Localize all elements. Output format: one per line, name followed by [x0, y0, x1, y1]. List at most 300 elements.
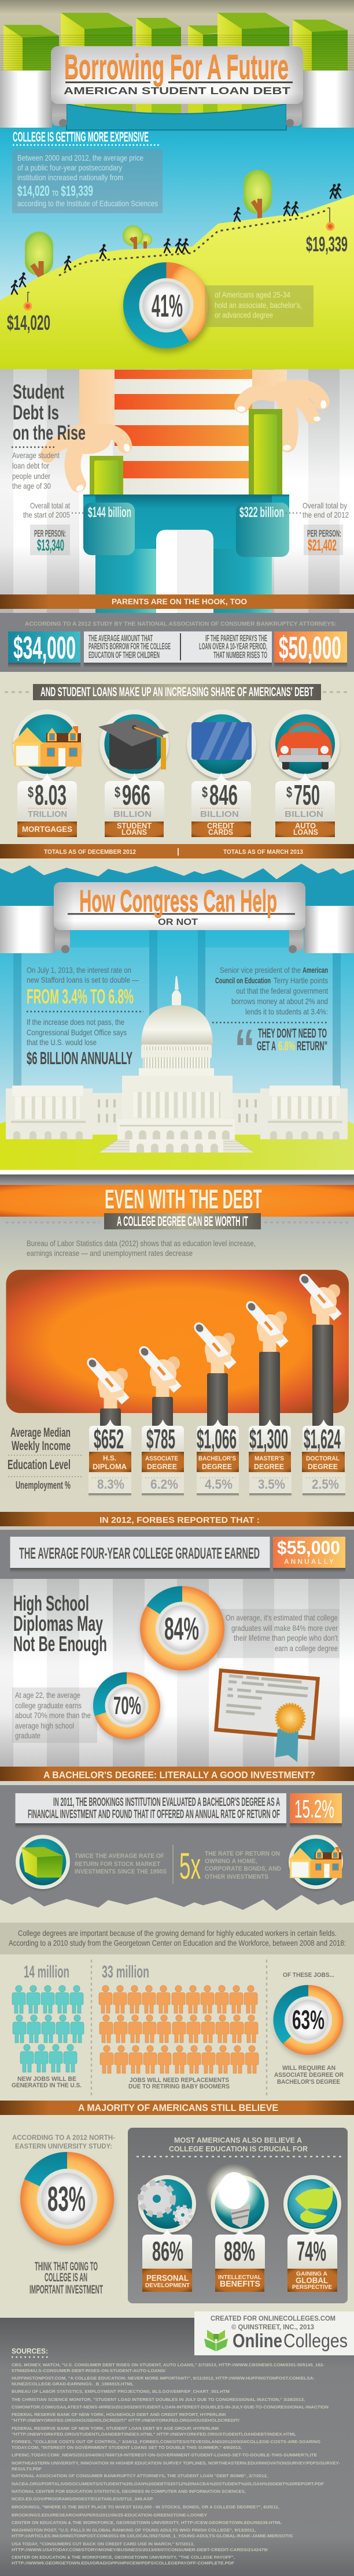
text block: sources list: 57568254/U.S-CONSUMER-DEBT-RISES-ON-STUDENT-AUTO-LOANS/ — [12, 2369, 165, 2373]
text block: sources list: HTTP://WWW9.GEORGETOWN.EDU/GRAD/GPPI/HPI/CEW/PDFS/COLLEGEPAYOFF-COMPLETE.PDF — [12, 2562, 235, 2566]
tag: auto loans value: LOANS — [293, 827, 318, 837]
background: lower sky — [0, 930, 354, 1127]
text block: sources list: FORBES, "COLLEGE COSTS OUT OF CONTROL," 3/24/12, FORBES.COM/SITES/STEVEODLAND/2012/03/24/COLLEGE-COSTS-ARE-SOARING — [12, 2440, 321, 2444]
icon: stacks of money — [0, 13, 354, 116]
tag: personal development: DEVELOPMENT — [145, 2283, 190, 2289]
icon: credit card — [187, 709, 256, 780]
pictogram: 14 million new jobs: 14 million — [24, 1962, 69, 1982]
pictogram: 14 million new jobs — [12, 1962, 84, 2089]
text block: sources list: BUREAU OF LABOR STATISTICS, EMPLOYMENT PROJECTIONS, BLS.GOV/EMP/EP_CHART_001.HTM — [12, 2390, 230, 2394]
row labels: Average Median — [10, 1425, 71, 1440]
ribbon: side bands of congress banner — [0, 906, 354, 953]
panel: graduate earnings — [0, 1526, 354, 1579]
marker: $14,020 — [7, 292, 50, 334]
pictogram: 14 million new jobs: NEW JOBS WILL BE — [17, 2076, 76, 2083]
stat: $55,000 annually — [273, 1537, 345, 1568]
text block: 70 percent: graduate — [15, 1731, 40, 1740]
text block: 70 percent: college graduate earns — [15, 1701, 82, 1710]
donut: 83 percent: EASTERN UNIVERSITY STUDY: — [15, 2143, 112, 2150]
text block: average student loan debt: the age of 30 — [12, 481, 51, 490]
title rule — [65, 81, 293, 83]
icon: capitol building — [6, 976, 348, 1153]
sky curve under banner — [67, 104, 286, 130]
text panel: amounts — [84, 631, 272, 663]
donut: 83 percent — [12, 2135, 115, 2296]
text panel: amounts: THAT NUMBER RISES TO — [213, 650, 267, 660]
tag: intellectual benefits: INTELLECTUAL — [218, 2274, 262, 2281]
text block: sources list: NACBA.ORG/PORTALS/0/DOCUMENTS/STUDENT%20LOAN%20DEBT/020712%20NACBA%20STUDENT%20LOAN%20DEBT%20REPORT.PDF — [12, 2482, 325, 2486]
ground — [0, 1120, 354, 1170]
text block: sources list: NCES.ED.GOV/PROGRAMS/DIGEST/D12/TABLES/DT12_349.ASP — [12, 2497, 153, 2501]
text block: interest rate doubling: new Stafford loans is set to double — — [27, 975, 139, 984]
heading: high school diplomas: Not Be Enough — [13, 1632, 107, 1656]
tag: personal development: PERSONAL — [146, 2273, 189, 2283]
column: master's degree: MASTER'S — [255, 1455, 284, 1462]
text block: sources list: CENTER ON EDUCATION & THE WORKFORCE, GEORGETOWN UNIVERSITY, "THE COLLEGE PAYOFF", — [12, 2556, 235, 2560]
text block: terry hartle quote: Council on Education — [215, 976, 271, 985]
teal podium — [83, 495, 289, 613]
text block: sources list: RESULTS.PDF — [12, 2467, 42, 2471]
column: doctoral degree — [302, 1419, 345, 1496]
label: $144 billion: $144 billion — [88, 504, 131, 521]
tag: auto loans value: BILLION — [285, 809, 323, 819]
column: h.s. diploma: DIPLOMA — [93, 1462, 127, 1471]
icon: light bulb — [206, 2164, 268, 2234]
text block: interest rate doubling: that the U.S. would lose — [27, 1038, 97, 1047]
text block: terry hartle quote: Terry Hartle points — [274, 976, 328, 985]
text block: 70 percent: average high school — [15, 1721, 74, 1730]
chart: income by education level — [6, 1270, 349, 1428]
text: rate of return on owning a home: OWNING A HOME, — [205, 1858, 257, 1865]
text block: 84 percent: earn a college degree — [275, 1644, 338, 1653]
text block: sources list: TODAY.COM, "INTEREST ON GOVERNMENT STUDENT LOANS SET TO DOUBLE THIS SUMMER," 4/9/2013, — [12, 2446, 242, 2450]
stat: auto loans — [271, 709, 340, 837]
capitol right wing — [260, 1086, 348, 1139]
text block: sources list: HUFFINGTONPOST.COM, "A COLLEGE EDUCATION: NEVER MORE IMPORTANT!", 9/11/2012, HTTP://WWW.HUFFINGTONPOST.COM/ELSA- — [12, 2377, 315, 2381]
subheading: or not: OR NOT — [158, 917, 198, 927]
callout: start of 2005 — [23, 501, 84, 555]
capitol left wing — [6, 1086, 93, 1139]
subheading: a college degree can be worth it — [6, 1213, 350, 1229]
background: sources panel — [0, 2318, 354, 2576]
text: twice the average: RETURN FOR STOCK MARKET — [75, 1861, 160, 1868]
band: a majority of americans still believe: A MAJORITY OF AMERICANS STILL BELIEVE — [78, 2102, 278, 2113]
text block: interest rate doubling: On July 1, 2013, the interest rate on — [27, 965, 131, 975]
stat: $34,000: $34,000 — [13, 630, 76, 666]
band: bachelor's investment — [0, 1767, 354, 1781]
column: master's degree: 3.5% — [258, 1477, 285, 1492]
column: associate degree: DEGREE — [147, 1462, 177, 1471]
credit box: online colleges: © QUINSTREET, INC., 2013 — [231, 2323, 314, 2331]
column: master's degree — [249, 1419, 292, 1496]
heading: student debt is on the rise — [12, 381, 86, 447]
text block: interest rate doubling: FROM 3.4% TO 6.8% — [27, 986, 134, 1008]
icon: diploma medal ribbon — [275, 1729, 298, 1762]
tag: mortgages value: $ — [28, 783, 34, 801]
icon: framed diploma — [214, 1668, 320, 1762]
tag: global perspective — [287, 2229, 337, 2292]
tag: personal development: 86% — [152, 2236, 183, 2266]
text block: interest rate doubling — [27, 965, 143, 1068]
tag: student loans value: LOANS — [121, 827, 147, 837]
text block: bureau of labor statistics: earnings increase — and unemployment rates decrease — [27, 1248, 193, 1258]
column: bachelor's degree — [197, 1419, 239, 1496]
text: twice the average: INVESTMENTS SINCE THE 1950S — [75, 1868, 167, 1875]
background: striped debt section — [0, 369, 354, 613]
donut: 63 percent: 63% — [292, 2005, 325, 2035]
text: rate of return on owning a home: THE RATE OF RETURN ON — [205, 1850, 280, 1857]
column: doctoral degree: 2.5% — [312, 1477, 339, 1492]
tag: global perspective: PERSPECTIVE — [292, 2284, 332, 2291]
text block: bureau of labor statistics: Bureau of Labor Statistics data (2012) shows that as education level increase, — [27, 1239, 256, 1248]
background: sky — [0, 104, 354, 300]
text block: tuition increase: Between 2000 and 2012, the average price — [17, 153, 143, 162]
statement — [10, 1537, 270, 1568]
text block: sources list: HTTP://WWW.USATODAY.COM/STORY/MONEY/BUSINESS/2013/05/07/CONSUMER-DEBT-CREDIT-CARDS/2142479/ — [12, 2548, 268, 2552]
column: bachelor's degree: $1,066 — [197, 1423, 237, 1454]
text block: sources list: LIFEINC.TODAY.COM/_NEWS/2013/04/09/17666719-INTEREST-ON-GOVERNMENT-STUDENT-LOANS-SET-TO-DOUBLE-THIS-SUMMER?LITE — [12, 2454, 317, 2458]
donut: 83 percent: ACCORDING TO A 2012 NORTH- — [12, 2135, 115, 2142]
text block: bureau of labor statistics — [27, 1239, 256, 1258]
donut: 63 percent: WILL REQUIRE AN — [282, 2065, 335, 2072]
subtitle: AMERICAN STUDENT LOAN DEBT — [64, 85, 290, 96]
band: parents are on the hook — [0, 594, 354, 609]
donut: 63 percent — [273, 1972, 344, 2086]
column: bachelor's degree: 4.5% — [205, 1477, 233, 1492]
background: teal below tan — [0, 855, 354, 930]
text block: sources list: FEDERAL RESERVE BANK OF NEW YORK, HOUSEHOLD DEBT AND CREDIT REPORT, HYPERLINK — [12, 2413, 226, 2417]
text block: terry hartle quote: American — [303, 965, 328, 975]
bar: 2012 debt — [249, 409, 282, 507]
callout: start of 2005: the start of 2005 — [23, 510, 70, 519]
background: top money header — [0, 0, 354, 116]
text block: sources list: BROOKINGS, "WHERE IS THE BEST PLACE TO INVEST $102,000 - IN STOCKS, BONDS, OR A COLLEGE DEGREE?", 6/25/11, — [12, 2506, 279, 2510]
logo wordmark: Online — [233, 2330, 282, 2351]
band: forbes — [0, 1512, 354, 1526]
tag: credit cards value: CREDIT — [207, 821, 234, 830]
tag: auto loans value — [275, 773, 335, 837]
heading: student debt is on the rise: Debt Is — [13, 402, 59, 424]
congress banner — [54, 882, 305, 953]
text: rate of return on owning a home — [205, 1850, 281, 1880]
arm: master's degree — [244, 1299, 287, 1428]
column: associate degree — [142, 1419, 184, 1496]
tag: auto loans value: $ — [286, 783, 292, 801]
text block: georgetown study — [0, 1923, 354, 1954]
tag: auto loans value: AUTO — [295, 821, 316, 830]
tag: intellectual benefits — [215, 2229, 265, 2292]
text block: interest rate doubling: $6 BILLION ANNUALLY — [27, 1048, 132, 1068]
tag: student loans value — [105, 773, 164, 837]
heading: even with the debt — [0, 1184, 354, 1217]
heading: college is getting more expensive: COLLEGE IS GETTING MORE EXPENSIVE — [13, 129, 149, 145]
column: h.s. diploma: H.S. — [103, 1454, 116, 1462]
text block: terry hartle quote: GET A — [257, 1039, 276, 1053]
text block: tuition increase: $14,020 TO $19,339 — [17, 183, 93, 199]
pictogram: 33 million jobs — [99, 1962, 259, 2090]
donut: 83 percent: COLLEGE IS AN — [45, 2271, 87, 2284]
donut: 41 percent: 41% — [152, 288, 183, 324]
pictogram: 33 million jobs: JOBS WILL NEED REPLACEMENTS — [130, 2077, 229, 2084]
heading: student debt is on the rise: on the Rise — [13, 422, 86, 444]
donut: 63 percent: BACHELOR'S DEGREE — [277, 2079, 340, 2086]
dotted trail up the hill — [59, 211, 325, 276]
column: h.s. diploma: 8.3% — [97, 1477, 124, 1492]
text block: sources list: USA TODAY, "CONSUMERS CUT BACK ON CREDIT CARD USE IN MARCH," 5/7/2013, — [12, 2542, 194, 2547]
logo wordmark — [233, 2330, 348, 2351]
icon: right hand — [237, 370, 326, 451]
icon: globe — [283, 2175, 341, 2234]
panel: most americans also believe — [128, 2128, 348, 2303]
capitol dome — [139, 976, 214, 1076]
tag: mortgages value: TRILLION — [28, 809, 67, 819]
text block: tuition increase — [12, 149, 163, 213]
credit box: online colleges — [194, 2311, 354, 2355]
column: bachelor's degree: BACHELOR'S — [198, 1455, 236, 1462]
pictogram: 14 million new jobs: GENERATED IN THE U.S. — [12, 2082, 82, 2089]
tag: credit cards value: $ — [202, 783, 208, 801]
text block: degree holders — [205, 285, 314, 327]
callout: start of 2005: $13,340 — [37, 536, 64, 554]
pictogram: 33 million jobs: DUE TO RETIRING BABY BOOMERS — [128, 2083, 230, 2090]
panel: most americans also believe: MOST AMERICANS ALSO BELIEVE A — [174, 2136, 303, 2144]
text block: interest rate doubling: If the increase does not pass, the — [27, 1017, 124, 1027]
text block: sources list: THE CHRISTIAN SCIENCE MONITOR, "STUDENT LOAD INTEREST DOUBLES IN JULY DUE TO CONGRESSIONAL INACTION," 3/28/2013, — [12, 2398, 305, 2402]
icon: house — [12, 709, 82, 780]
column: h.s. diploma — [89, 1419, 131, 1496]
text block: terry hartle quote: “ — [234, 1018, 255, 1079]
text block: sources list: CSMONITOR.COM/USA/LATEST-NEWS-WIRES/2013/0329/STUDENT-LOAN-INTEREST-DOUBLES-IN-JULY-DUE-TO-CONGRESSIONAL-INACTION — [12, 2406, 329, 2410]
donut: 63 percent: OF THESE JOBS... — [283, 1972, 334, 1979]
arm: bachelor's degree — [191, 1320, 235, 1428]
stat: credit cards — [187, 709, 256, 837]
tag: mortgages value: 8.03 — [35, 780, 67, 811]
stat: $55,000 annually: $55,000 — [277, 1537, 340, 1558]
text block: tuition increase: according to the Institute of Education Sciences — [17, 199, 158, 208]
text block: 70 percent: about 70% more than the — [15, 1711, 91, 1720]
tag: mortgages value — [17, 773, 77, 837]
row labels: Education Level — [8, 1457, 71, 1472]
heading: student debt is on the rise: Student — [13, 381, 64, 403]
donut: 83 percent: 83% — [47, 2180, 86, 2218]
column: h.s. diploma: $652 — [94, 1423, 124, 1454]
heading: high school diplomas — [13, 1592, 107, 1656]
text block: tuition increase: of a public four-year postsecondary — [17, 163, 122, 172]
hill — [0, 195, 354, 369]
column: doctoral degree: DEGREE — [308, 1462, 338, 1471]
icon: money medallion — [16, 1835, 70, 1890]
band: totals as of — [0, 844, 354, 858]
panel: investment — [0, 1781, 354, 1910]
marker: $19,339 — [306, 208, 348, 256]
tag: credit cards value: BILLION — [200, 809, 239, 819]
text block: average student loan debt: loan debt for — [12, 461, 49, 470]
runners — [12, 183, 341, 294]
tag: global perspective: GAINING A — [296, 2271, 327, 2277]
background: tan lower section — [0, 1895, 354, 2318]
ribbon: side bands of title banner — [0, 70, 354, 128]
tag: credit cards value — [191, 773, 251, 837]
heading: sources: SOURCES: — [12, 2347, 48, 2355]
donut: 83 percent: THINK THAT GOING TO — [35, 2260, 98, 2273]
icon: left hand — [47, 370, 131, 493]
column: doctoral degree: DOCTORAL — [306, 1455, 340, 1462]
tag: intellectual benefits: BENEFITS — [220, 2279, 260, 2289]
text block: sources list: FEDERAL RESERVE BANK OF NEW YORK, STUDENT LOAN DEBT BY AGE GROUP, HYPERLINK — [12, 2427, 219, 2431]
tag: global perspective: GLOBAL — [296, 2276, 328, 2285]
column: associate degree: ASSOCIATE — [145, 1455, 178, 1462]
column: associate degree: 6.2% — [150, 1477, 178, 1492]
callout: start of 2005: PER PERSON: — [34, 528, 66, 539]
tag: mortgages value: MORTGAGES — [22, 824, 72, 834]
icon: car — [271, 709, 340, 780]
band: a majority of americans still believe — [0, 2101, 354, 2115]
divider — [172, 1845, 174, 1884]
divider strips — [0, 1170, 354, 1185]
text panel: amounts: THE AVERAGE AMOUNT THAT — [89, 634, 153, 644]
text block: sources list: "HTTP://NEWYORKFED.ORG/HOUSEHOLDCREDIT/" HTTP://NEWYORKFED.ORG/HOUSEHOLDCREDIT/ — [12, 2419, 239, 2423]
text block: degree holders: hold an associate, bachelor's, — [215, 300, 302, 310]
tag: global perspective: 74% — [297, 2236, 326, 2266]
tag: student loans value: $ — [115, 783, 120, 801]
stat: student loans — [98, 709, 169, 837]
text block: sources list: NATIONAL ASSOCIATION OF CONSUMER BANKRUPTCY ATTORNEYS, THE STUDENT LOAN "DEBT BOMB", 2/7/2012, — [12, 2474, 268, 2478]
donut: 70 percent — [93, 1672, 161, 1742]
panel: parents borrowing: LOAN OVER A 10-YEAR PERIOD, — [199, 642, 267, 652]
text block: sources list: WASHINGTON POST, "U.S. FALLS IN GLOBAL RANKING OF YOUNG ADULTS WHO FINISH COLLEGE", 9/13/2011, — [12, 2529, 256, 2533]
panel: parents borrowing — [0, 613, 354, 672]
text: twice the average: TWICE THE AVERAGE RATE OF — [75, 1853, 164, 1860]
text block: sources list: HTTP://ARTICLES.WASHINGTONPOST.COM/2011-09-13/LOCAL/35273245_1_YOUNG-ADULTS-GLOBAL-RANK-JAMIE-MERISOTIS — [12, 2534, 293, 2538]
text block: sources list: BROOKINGS.EDU/RESEARCH/PAPERS/2011/06/25-EDUCATION-GREENSTONE-LOONEY — [12, 2514, 207, 2518]
text block: sources list: CENTER ON EDUCATION & THE WORKFORCE, GEORGETOWN UNIVERSITY, HTTP://CEW.GEORGETOWN.EDU/58239.HTML — [12, 2521, 282, 2525]
stat: $55,000 annually: ANNUALLY — [284, 1558, 334, 1566]
vertical dashed separators — [91, 1960, 267, 2096]
stat: mortgages — [12, 709, 82, 837]
text block: sources list — [12, 2363, 341, 2566]
column: bachelor's degree: DEGREE — [202, 1462, 232, 1471]
heading: high school diplomas: High School — [13, 1592, 89, 1615]
money stacks visible under banner — [61, 70, 286, 114]
source line: ACCORDING TO A 2012 STUDY BY THE NATIONAL ASSOCIATION OF CONSUMER BANKRUPTCY ATTORNEYS: — [25, 620, 337, 627]
text block: terry hartle quote: Senior vice president of the — [220, 965, 301, 975]
donut: 70 percent: 70% — [113, 1692, 141, 1720]
bar: 2005 debt — [90, 456, 123, 508]
arm: doctoral degree — [297, 1272, 340, 1428]
pictogram: 33 million jobs: 33 million — [102, 1962, 149, 1982]
text block: terry hartle quote: lends it to students at 3.4%: — [245, 1007, 328, 1016]
callout: start of 2005: Overall total at — [30, 501, 70, 510]
panel: most americans also believe: COLLEGE EDUCATION IS CRUCIAL FOR — [169, 2144, 308, 2153]
background: striped diplomas section — [0, 1579, 354, 1767]
background: tan with torn edge — [0, 672, 354, 879]
tag: credit cards value: 846 — [209, 780, 238, 811]
trees — [25, 170, 272, 300]
text panel: amounts: PARENTS BORROW FOR THE COLLEGE — [89, 642, 171, 652]
text: rate of return on owning a home: CORPORATE BONDS, AND — [205, 1865, 281, 1872]
icon: graduation cap — [98, 709, 169, 780]
band: parents are on the hook: PARENTS ARE ON THE HOOK, TOO — [112, 597, 247, 606]
statement: brookings — [15, 1793, 286, 1823]
credit box: online colleges: CREATED FOR ONLINECOLLEGES.COM — [211, 2314, 335, 2322]
text block: terry hartle quote — [212, 965, 329, 1079]
text block: sources list: NORTHEASTERN UNIVERSITY, INNOVATION IN HIGHER EDUCATION SURVEY TOPLINES, NORTHEASTERN.EDU/INNOVATIONSURVEY/PDFS/SURVEY- — [12, 2462, 341, 2466]
text block: sources list: NUNEZ/COLLEGE-GRAD-EARNINGS-_B_1866915.HTML — [12, 2382, 134, 2387]
row labels: Unemployment % — [16, 1480, 71, 1491]
text block: terry hartle quote: borrows money at about 2% and — [231, 997, 328, 1006]
text block: sources list: CBS, MONEY, WATCH, "U.S. CONSUMER DEBT RISES ON STUDENT, AUTO LOANS," 2/7/2013, HTTP://WWW.CBSNEWS.COM/8301-505145_162- — [12, 2363, 325, 2367]
capitol centre block — [99, 1076, 253, 1153]
stat: $34,000 — [8, 630, 80, 666]
callout: end of 2012 — [286, 501, 349, 555]
text: twice the average — [75, 1853, 167, 1875]
icon: logo book — [204, 2330, 228, 2351]
band: totals as of: TOTALS AS OF MARCH 2013 — [223, 849, 303, 856]
row labels: Weekly Income — [12, 1438, 71, 1453]
text block: 70 percent: At age 22, the average — [15, 1690, 80, 1700]
background: tan section — [0, 1217, 354, 1512]
text block: average student loan debt — [12, 451, 60, 490]
text block: 84 percent — [217, 1609, 340, 1658]
text block: tuition increase: institution increased nationally from — [17, 173, 123, 182]
tag: student loans value: STUDENT — [117, 821, 152, 830]
column: master's degree: $1,300 — [249, 1423, 288, 1454]
tag: credit cards value: CARDS — [208, 827, 233, 837]
capitol arches — [13, 1130, 340, 1153]
column: associate degree: $785 — [146, 1423, 175, 1454]
column: master's degree: DEGREE — [254, 1462, 284, 1471]
band: bachelor's investment: A BACHELOR'S DEGREE: LITERALLY A GOOD INVESTMENT? — [43, 1770, 315, 1780]
donut: 83 percent: IMPORTANT INVESTMENT — [30, 2283, 103, 2296]
text block: sources list: NATIONAL CENTER FOR EDUCATION STATISTICS, DEGREES IN COMPUTER AND INFORMATION SCIENCES, — [12, 2490, 246, 2494]
text block: terry hartle quote: 6.8% — [278, 1039, 295, 1053]
band: totals as of: TOTALS AS OF DECEMBER 2012 — [44, 849, 136, 856]
donut: 84 percent: 84% — [164, 1611, 199, 1646]
heading: high school diplomas: Diplomas May — [13, 1612, 103, 1635]
label: $322 billion: $322 billion — [239, 504, 284, 521]
band: forbes: IN 2012, FORBES REPORTED THAT : — [99, 1515, 260, 1525]
text: rate of return on owning a home: OTHER INVESTMENTS — [205, 1874, 268, 1880]
donut: 41 percent — [123, 262, 211, 352]
tag: personal development — [142, 2229, 192, 2292]
text block: average student loan debt: people under — [12, 471, 50, 481]
icon: house medallion — [288, 1835, 343, 1890]
text panel: amounts: IF THE PARENT REPAYS THE — [205, 634, 267, 644]
flag stripes — [115, 370, 252, 495]
stat: 5x: 5x — [179, 1845, 201, 1887]
donut: 84 percent — [140, 1586, 226, 1674]
text block: sources list: "HTTP://NEWYORKFED.ORG/STUDENTLOANDEBT/INDEX.HTML" HTTP://NEWYORKFED.ORG/STUDENTLOANDEBT/INDEX.HTML — [12, 2433, 297, 2437]
icon: gears — [138, 2175, 196, 2234]
text panel: amounts: EDUCATION OF THEIR CHILDREN — [89, 650, 160, 660]
text block: degree holders: of Americans aged 25-34 — [215, 290, 290, 299]
arm: h.s. diploma — [84, 1355, 128, 1428]
tag: student loans value: 966 — [122, 780, 150, 811]
title banner — [51, 46, 303, 127]
tag: auto loans value: 750 — [294, 780, 320, 811]
banner rule — [68, 913, 295, 915]
donut: 63 percent: ASSOCIATE DEGREE OR — [274, 2072, 344, 2079]
capitol connectors — [93, 1093, 260, 1135]
text block: 70 percent — [12, 1687, 97, 1743]
marker: $14,020: $14,020 — [7, 311, 50, 334]
text block: degree holders: or advanced degree — [215, 310, 273, 319]
arm: associate degree — [137, 1344, 180, 1428]
row labels — [8, 1425, 82, 1491]
tag: intellectual benefits: 88% — [224, 2236, 255, 2266]
tag: student loans value: BILLION — [113, 809, 152, 819]
text block: interest rate doubling: Congressional Budget Office says — [27, 1028, 127, 1037]
